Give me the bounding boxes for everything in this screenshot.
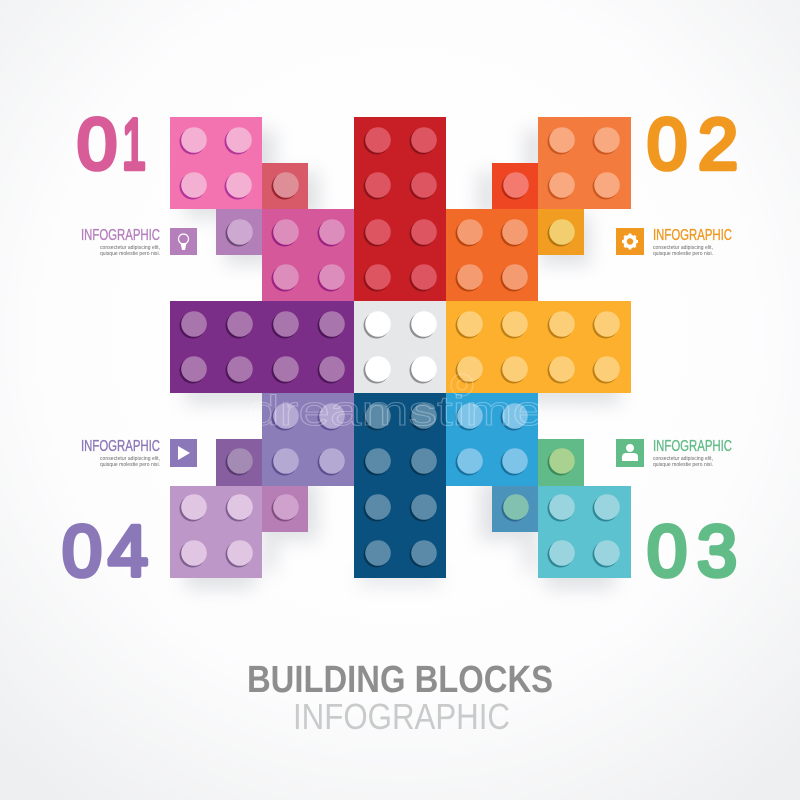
- block: sky blue 2x2: [446, 393, 538, 486]
- number 02: 0: [647, 105, 687, 185]
- block: coral red single: [262, 163, 308, 209]
- block: navy tall 2x4: [354, 393, 446, 578]
- number 03: [647, 512, 737, 592]
- text block 01: consectetur adipiscing elit,: [100, 245, 160, 251]
- title: BUILDING BLOCKS: [247, 659, 553, 701]
- watermark: [248, 374, 544, 434]
- block: white centre 2x2: [354, 301, 446, 393]
- subtitle: INFOGRAPHIC: [293, 696, 510, 737]
- block: light lilac 2x2: [170, 486, 262, 578]
- block: pink 2x2: [170, 117, 262, 209]
- number 01: 0: [77, 105, 117, 185]
- block: violet single: [216, 439, 262, 486]
- block: steel blue single: [492, 486, 538, 532]
- number 04: [62, 512, 148, 592]
- block: deep orange 2x2: [446, 209, 538, 301]
- number 01: [77, 105, 146, 185]
- watermark: dreamstime: [248, 387, 544, 434]
- text block 02: quisque molestie pero nisi.: [653, 251, 713, 257]
- number 03: 0: [647, 512, 687, 592]
- text block 03: [653, 438, 732, 468]
- number 02: 2: [698, 105, 738, 185]
- text block 02: [653, 227, 732, 257]
- block: orange 2x2: [538, 117, 631, 209]
- text block 02: INFOGRAPHIC: [653, 227, 732, 244]
- text block 03: consectetur adipiscing elit,: [653, 456, 713, 462]
- icon: light bulb: [170, 228, 197, 255]
- block: teal 2x2: [538, 486, 631, 578]
- block shadows: [185, 130, 620, 589]
- block: golden single: [538, 209, 584, 255]
- text block 04: [81, 438, 160, 468]
- text block 04: consectetur adipiscing elit,: [100, 456, 160, 462]
- number 03: 3: [697, 512, 737, 592]
- text block 01: quisque molestie pero nisi.: [100, 251, 160, 257]
- block: amber 4x2: [446, 301, 631, 393]
- block: red-orange single: [492, 163, 538, 209]
- block: green single: [538, 439, 584, 486]
- icon: person: [616, 439, 644, 467]
- number 04: 4: [108, 512, 148, 592]
- text block 01: INFOGRAPHIC: [81, 227, 160, 244]
- number 04: 0: [62, 512, 102, 592]
- block: periwinkle 2x2: [262, 393, 354, 486]
- text block 03: INFOGRAPHIC: [653, 438, 732, 455]
- icon: gear: [616, 228, 644, 255]
- block: red tall 2x4: [354, 117, 446, 301]
- block: magenta 2x2: [262, 209, 354, 301]
- text block 02: consectetur adipiscing elit,: [653, 245, 713, 251]
- text block 04: INFOGRAPHIC: [81, 438, 160, 455]
- block: orchid single: [262, 486, 308, 532]
- block: lilac single: [216, 209, 262, 255]
- icon: play: [170, 439, 197, 467]
- block: purple 4x2: [170, 301, 354, 393]
- text block 01: [81, 227, 160, 257]
- text block 04: quisque molestie pero nisi.: [100, 462, 160, 468]
- number 02: [647, 105, 738, 185]
- text block 03: quisque molestie pero nisi.: [653, 462, 713, 468]
- number 01: 1: [122, 105, 146, 185]
